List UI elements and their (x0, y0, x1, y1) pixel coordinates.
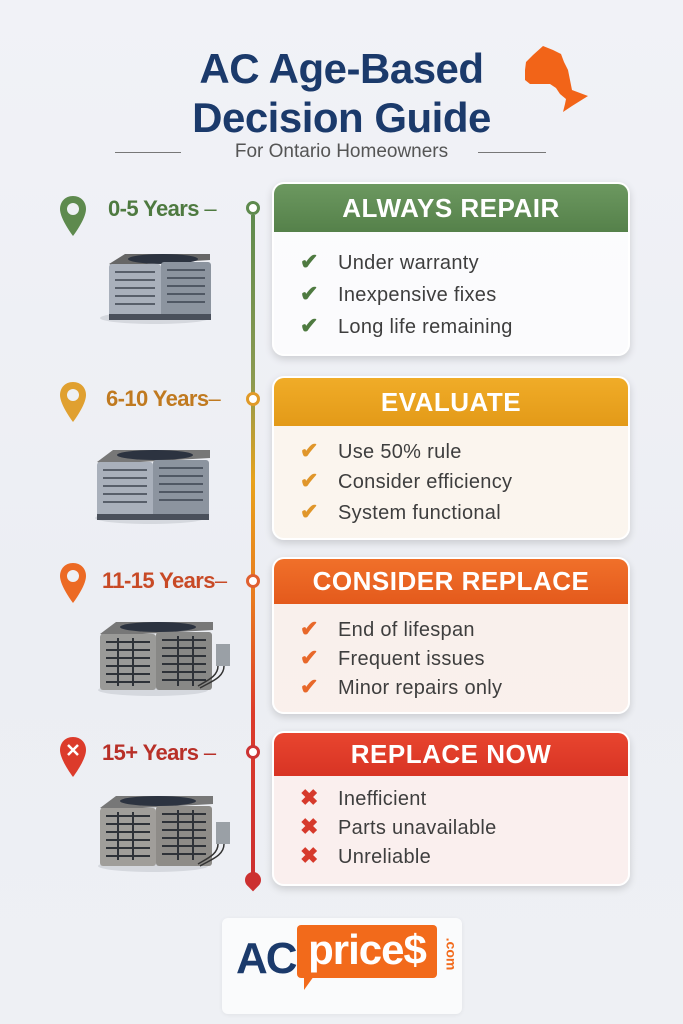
timeline line (251, 215, 255, 880)
logo .com: .com (443, 938, 459, 970)
timeline node (246, 745, 260, 759)
title: AC Age-Based (199, 45, 484, 92)
panel: consider replace (272, 557, 630, 714)
label: 11-15 Years: 11-15 Years– (102, 568, 227, 593)
panel: always repair: Under warranty (338, 252, 479, 274)
panel: replace now: ✖ (300, 785, 318, 810)
timeline node (246, 574, 260, 588)
timeline node (246, 201, 260, 215)
panel: replace now (272, 731, 630, 886)
panel: evaluate: System functional (338, 502, 501, 524)
title: Decision Guide (192, 94, 491, 141)
panel: consider replace: End of lifespan (338, 619, 475, 641)
panel: evaluate: Use 50% rule (338, 441, 462, 463)
panel: always repair: Inexpensive fixes (338, 284, 497, 306)
label: 15+ Years: 15+ Years – (102, 740, 216, 765)
icon: ontario map (525, 46, 588, 112)
timeline node (246, 392, 260, 406)
panel: evaluate: ✔ (300, 499, 318, 524)
logo: acprices.com (222, 918, 462, 1014)
panel: always repair: ✔ (300, 313, 318, 338)
panel: consider replace: Frequent issues (338, 648, 485, 670)
icon: pin yellow (60, 382, 86, 422)
panel: consider replace: ✔ (300, 616, 318, 641)
panel: replace now: REPLACE NOW (351, 739, 551, 769)
panel: evaluate (272, 376, 630, 540)
label: 0-5 Years: 0-5 Years – (108, 196, 216, 221)
panel: always repair: ✔ (300, 249, 318, 274)
icon: ac unit mid (95, 450, 210, 524)
panel: evaluate: ✔ (300, 438, 318, 463)
panel: always repair: Long life remaining (338, 316, 513, 338)
title (192, 45, 491, 141)
panel: consider replace: ✔ (300, 645, 318, 670)
panel: evaluate: Consider efficiency (338, 471, 512, 493)
icon: ac unit old (98, 622, 230, 696)
panel: consider replace: Minor repairs only (338, 677, 502, 699)
panel: evaluate: EVALUATE (381, 387, 521, 417)
label: 6-10 Years: 6-10 Years– (106, 386, 220, 411)
icon: pin red x (60, 737, 86, 777)
panel: replace now: Parts unavailable (338, 817, 497, 839)
logo orange box: price$ (308, 926, 426, 973)
icon: pin orange (60, 563, 86, 603)
stage 1 (60, 196, 260, 236)
panel: always repair (272, 182, 630, 356)
stage 3 (60, 563, 260, 603)
panel: replace now: Unreliable (338, 846, 431, 868)
icon: ac unit worn (98, 796, 230, 872)
logo tail (304, 976, 322, 990)
panel: always repair: ALWAYS REPAIR (342, 193, 560, 223)
stage 4 (60, 737, 260, 777)
stage 2 (60, 382, 260, 422)
panel: evaluate: ✔ (300, 468, 318, 493)
panel: always repair: ✔ (300, 281, 318, 306)
icon: pin green (60, 196, 86, 236)
subtitle: For Ontario Homeowners (235, 141, 448, 162)
logo text AC: AC (236, 934, 296, 983)
panel: replace now: Inefficient (338, 788, 427, 810)
panel: replace now: ✖ (300, 843, 318, 868)
panel: consider replace: ✔ (300, 674, 318, 699)
timeline end dot (242, 869, 264, 891)
icon: ac unit new (100, 254, 211, 324)
panel: replace now: ✖ (300, 814, 318, 839)
panel: consider replace: CONSIDER REPLACE (313, 566, 589, 596)
